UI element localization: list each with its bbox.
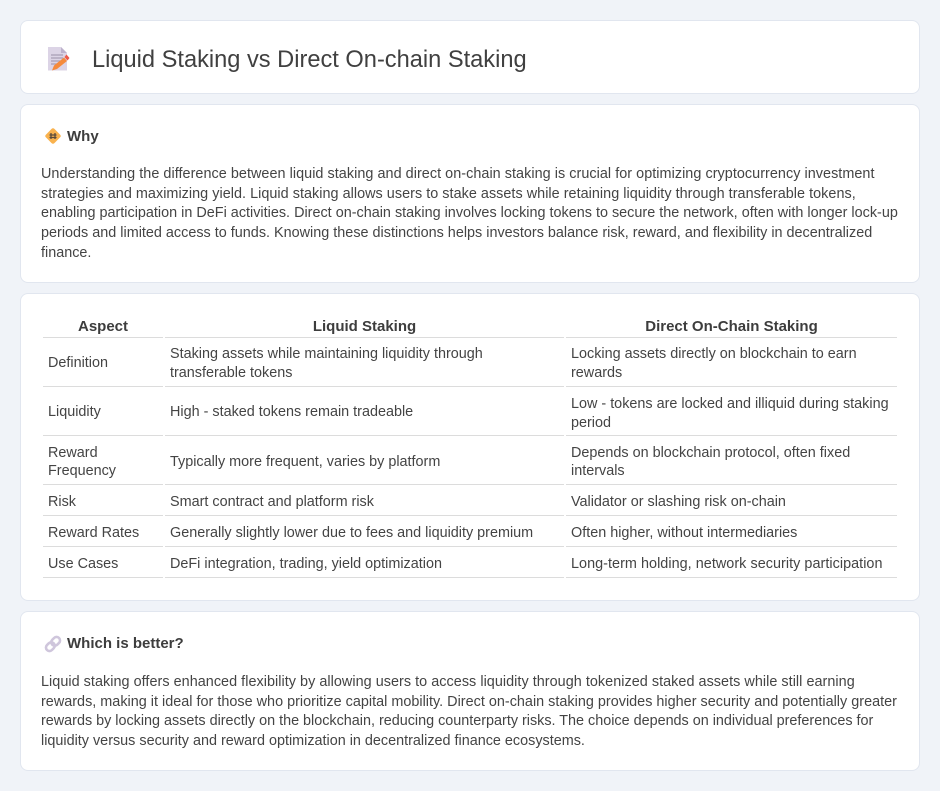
text block: which is better: rewards by locking assets directly on the blockchain, reducing counterparty risks. The choice depends on individual preferences for: [41, 713, 873, 729]
row: risk: [48, 494, 786, 510]
row: use cases: Long-term holding, network security participation: [571, 556, 883, 572]
icon: chain link: [44, 636, 62, 652]
panel: why: [20, 104, 920, 283]
table header: Liquid Staking: [313, 318, 416, 335]
row: liquidity: Liquidity: [48, 404, 101, 420]
row: reward rates: Reward Rates: [48, 525, 139, 541]
text block: why: Understanding the difference between liquid staking and direct on-chain staking is crucial for optimizing cryptocurrency investment: [41, 166, 875, 182]
row: definition: rewards: [571, 365, 622, 381]
text block: why: periods and limited access to funds. Knowing these distinctions helps investors balance risk, reward, and flexibility in decentralized: [41, 225, 872, 241]
row: definition: transferable tokens: [170, 365, 292, 381]
row: liquidity: period: [571, 415, 611, 431]
row: reward frequency: [48, 445, 850, 479]
row: liquidity: Low - tokens are locked and illiquid during staking: [571, 396, 889, 412]
text block: which is better: rewards, making it ideal for those who prioritize capital mobility. Direct on-chain staking provides higher security and potentially greater: [41, 694, 897, 710]
row: reward frequency: intervals: [571, 463, 625, 479]
row: risk: Validator or slashing risk on-chain: [571, 494, 786, 510]
icon: diamond sign: [45, 128, 61, 144]
row: risk: Risk: [48, 494, 76, 510]
panel: title header: [20, 20, 920, 94]
text block: which is better: liquidity versus security and reward optimization in decentralized finance ecosystems.: [41, 733, 585, 749]
row: reward frequency: Reward: [48, 445, 98, 461]
icon: document with pencil: [48, 47, 70, 70]
row: use cases: [48, 556, 883, 572]
row: reward rates: Generally slightly lower due to fees and liquidity premium: [170, 525, 533, 541]
title: Liquid Staking vs Direct On-chain Staking: [92, 47, 527, 73]
text block: why: [41, 166, 898, 261]
row: use cases: DeFi integration, trading, yield optimization: [170, 556, 442, 572]
row: definition: [48, 346, 857, 381]
text block: why: finance.: [41, 245, 91, 261]
row: use cases: Use Cases: [48, 556, 118, 572]
row: reward rates: Often higher, without intermediaries: [571, 525, 797, 541]
heading: why: Why: [67, 128, 99, 145]
row: liquidity: High - staked tokens remain tradeable: [170, 404, 413, 420]
heading: which is better: Which is better?: [67, 635, 184, 652]
table header: Direct On-Chain Staking: [645, 318, 818, 335]
row: reward frequency: Frequency: [48, 463, 116, 479]
panel: which is better: [20, 611, 920, 771]
text block: why: enabling participation in DeFi activities. Direct on-chain staking involves locking tokens to secure the network, often with longer lock-up: [41, 205, 898, 221]
text block: why: strategies and maximizing yield. Liquid staking allows users to stake assets while retaining liquidity through transferable tokens,: [41, 186, 856, 202]
table header: Aspect: [78, 318, 128, 335]
text block: which is better: Liquid staking offers enhanced flexibility by allowing users to access liquidity through tokenized staked assets while still earning: [41, 674, 855, 690]
table header: [78, 318, 818, 335]
row: definition: Staking assets while maintaining liquidity through: [170, 346, 483, 362]
row: reward frequency: Typically more frequent, varies by platform: [170, 454, 440, 470]
row: liquidity: [48, 396, 889, 431]
panel: comparison table: [20, 293, 920, 601]
text block: which is better: [41, 674, 897, 749]
row: definition: Locking assets directly on blockchain to earn: [571, 346, 857, 362]
table: comparison: [43, 318, 897, 578]
row: reward rates: [48, 525, 797, 541]
row: definition: Definition: [48, 355, 108, 371]
row: risk: Smart contract and platform risk: [170, 494, 374, 510]
row: reward frequency: Depends on blockchain protocol, often fixed: [571, 445, 850, 461]
